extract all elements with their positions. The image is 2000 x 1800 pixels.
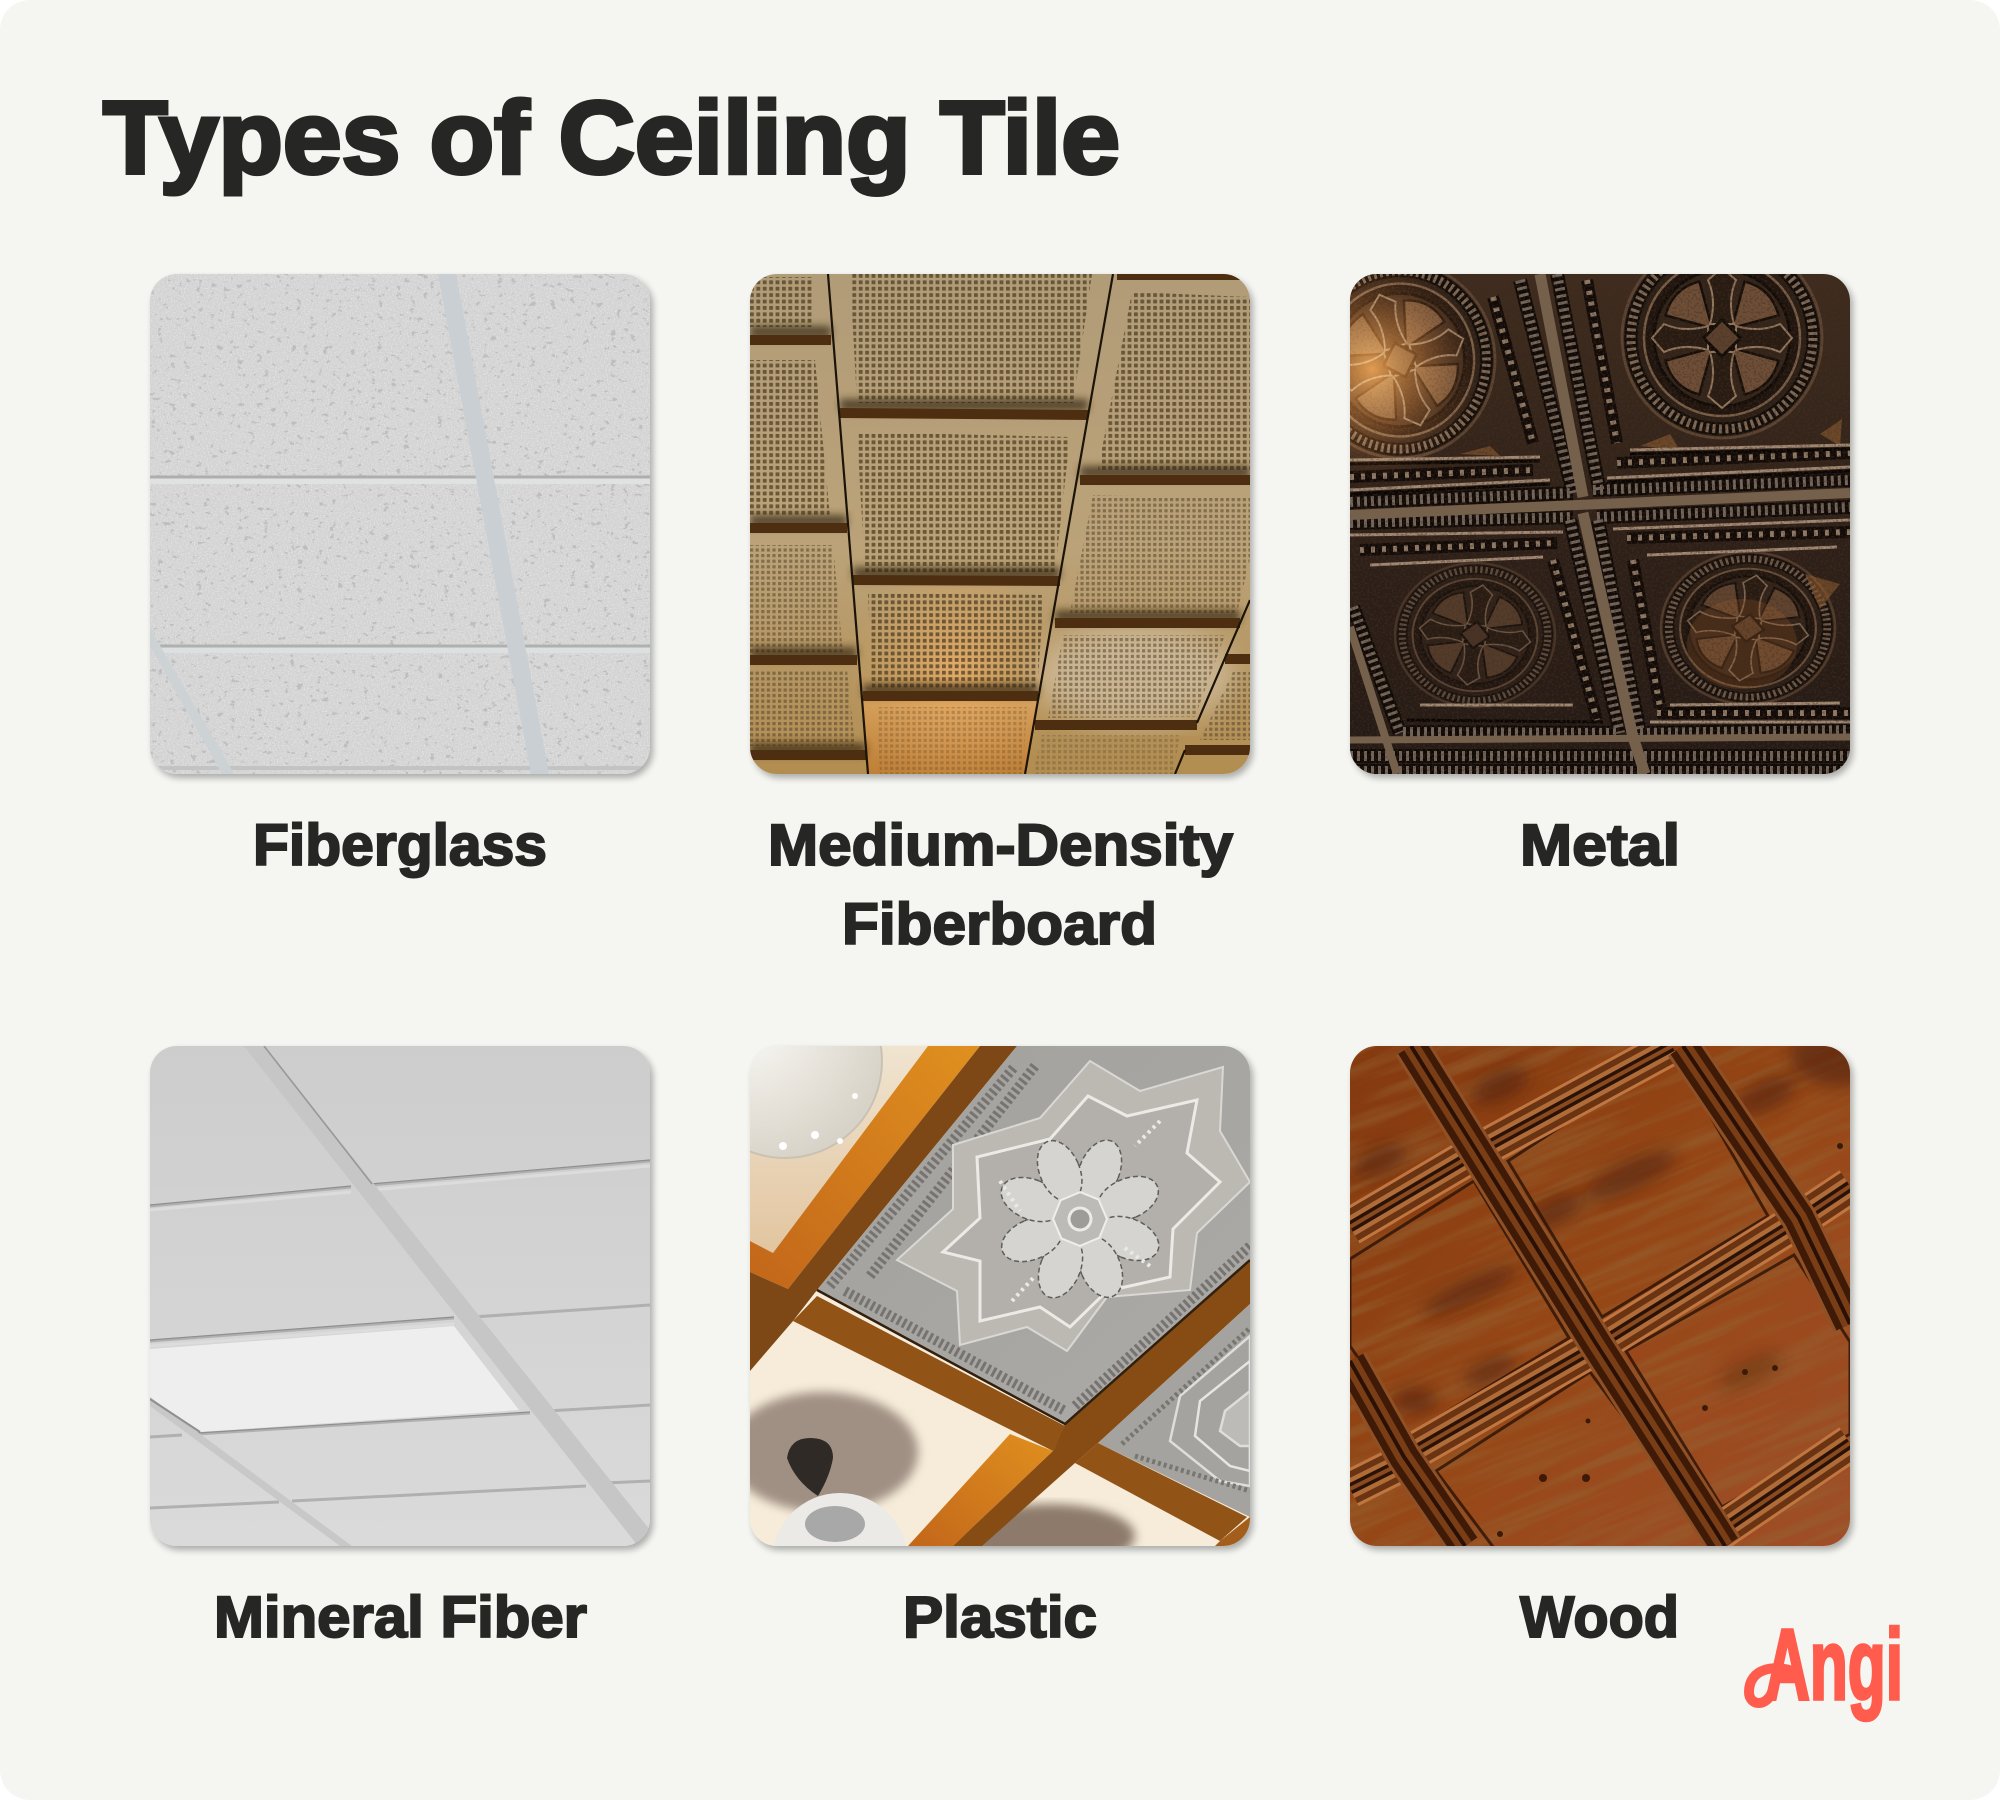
logo: Angi: Angi: [1765, 1609, 1903, 1721]
panel: mineral fiber photo: [150, 1046, 650, 1546]
title: Types of Ceiling Tile: [103, 80, 1120, 195]
panel: wood photo: [1350, 1046, 1850, 1546]
label: mineral fiber: Mineral Fiber: [214, 1585, 587, 1650]
glass globe top-left: [688, 964, 882, 1158]
label: medium-density fiberboard: Fiberboard: [842, 892, 1157, 957]
logo: Angi: [1749, 1609, 1903, 1721]
wood mouldings running up-right: [1350, 1046, 1850, 1535]
label: medium-density fiberboard: [768, 813, 1233, 957]
star ornament: [830, 1061, 1250, 1411]
wood mouldings running down-right: [1350, 1046, 1850, 1546]
panel: fiberglass photo: [150, 274, 650, 774]
label: medium-density fiberboard: Medium-Density: [768, 813, 1233, 878]
panel: metal photo: [1350, 274, 1850, 774]
panel: medium-density fiberboard photo: [750, 274, 1250, 774]
wood panel inner frames: [1350, 1053, 1850, 1556]
panel: plastic photo: [750, 1046, 1250, 1546]
shadows and pendant lamp: [728, 1392, 1135, 1629]
label: wood: Wood: [1520, 1585, 1679, 1650]
label: fiberglass: Fiberglass: [253, 813, 547, 878]
metal carpet borders: [1350, 274, 1850, 771]
label: metal: Metal: [1520, 813, 1680, 878]
label: plastic: Plastic: [903, 1585, 1097, 1650]
second tile ornament: [1122, 1328, 1250, 1491]
